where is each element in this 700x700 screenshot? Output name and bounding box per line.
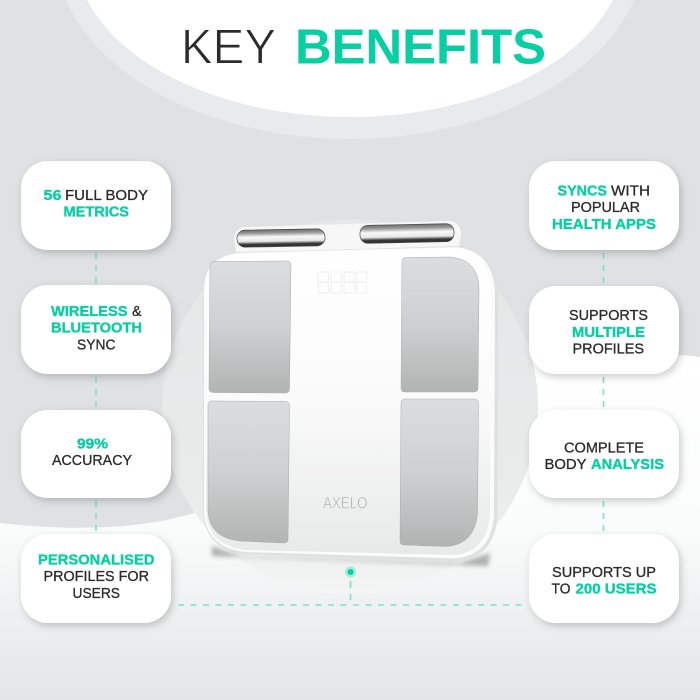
electrode pad: bottom left bbox=[208, 401, 290, 543]
connector: left column bbox=[95, 253, 97, 534]
card: supports up to 200 users: 200 USERS bbox=[576, 582, 657, 598]
scale body edge bbox=[203, 246, 498, 562]
marker dot bbox=[345, 566, 356, 578]
brand logo: AXELO bbox=[323, 494, 368, 512]
card: wireless and bluetooth sync: BLUETOOTH bbox=[51, 320, 142, 336]
electrode pad: top left bbox=[209, 261, 291, 393]
title bbox=[181, 20, 546, 74]
electrode pad: bottom right bbox=[400, 399, 478, 546]
card: 56 full body metrics bbox=[21, 161, 171, 250]
card: supports multiple profiles: SUPPORTS bbox=[569, 308, 648, 324]
electrode pad: top right bbox=[401, 257, 479, 392]
handle base bbox=[234, 221, 461, 252]
card: wireless and bluetooth sync: WIRELESS bbox=[51, 304, 128, 320]
background hill bbox=[0, 353, 700, 700]
digital display bbox=[318, 272, 366, 293]
card: personalised profiles: PROFILES FOR bbox=[44, 569, 149, 585]
card: 56 full body metrics: METRICS bbox=[64, 204, 129, 220]
card: syncs with popular health apps: SYNCS bbox=[558, 184, 607, 200]
card: supports up to 200 users: SUPPORTS UP bbox=[552, 565, 656, 581]
card: supports multiple profiles: PROFILES bbox=[572, 342, 644, 358]
scale shadow bbox=[212, 546, 490, 566]
card: personalised profiles: PERSONALISED bbox=[38, 552, 154, 568]
card: syncs with popular health apps: HEALTH APPS bbox=[552, 217, 656, 233]
right chrome handle bbox=[360, 224, 454, 243]
card: wireless and bluetooth sync: & bbox=[132, 304, 142, 320]
connector: vertical line from dot bbox=[350, 581, 352, 600]
title: KEY bbox=[181, 20, 276, 74]
card: 99% accuracy bbox=[21, 410, 171, 498]
card: syncs with popular health apps: POPULAR bbox=[571, 200, 640, 216]
card: syncs with popular health apps: WITH bbox=[611, 184, 650, 200]
title: BENEFITS bbox=[295, 20, 546, 74]
card: supports up to 200 users: TO bbox=[552, 582, 570, 598]
left chrome handle bbox=[237, 229, 325, 247]
card: supports multiple profiles bbox=[529, 286, 679, 374]
background circle behind scale bbox=[162, 219, 538, 595]
card: supports multiple profiles: MULTIPLE bbox=[572, 325, 645, 341]
card: syncs with popular health apps bbox=[529, 161, 679, 250]
card: complete body analysis bbox=[529, 410, 679, 498]
card: personalised profiles bbox=[21, 534, 171, 623]
card: complete body analysis: ANALYSIS bbox=[591, 457, 664, 473]
card: wireless and bluetooth sync: SYNC bbox=[77, 338, 116, 354]
card: wireless and bluetooth sync bbox=[21, 285, 171, 374]
card: supports up to 200 users bbox=[529, 534, 679, 623]
header inner ellipse bbox=[74, 0, 626, 117]
card: 56 full body metrics: 56 bbox=[44, 188, 62, 204]
card: personalised profiles: USERS bbox=[72, 586, 120, 602]
card: 99% accuracy: ACCURACY bbox=[52, 453, 132, 469]
scale body top bbox=[206, 248, 491, 555]
card: complete body analysis: COMPLETE bbox=[564, 440, 644, 456]
product: smart scale bbox=[203, 221, 498, 566]
connector: right column bbox=[602, 253, 604, 534]
header outer ellipse bbox=[56, 0, 644, 139]
connector: horizontal line under scale bbox=[178, 604, 525, 606]
card: complete body analysis: BODY bbox=[544, 457, 587, 473]
card: 99% accuracy: 99% bbox=[77, 436, 108, 452]
scale body rim bbox=[204, 247, 495, 558]
card: 56 full body metrics: FULL BODY bbox=[65, 188, 148, 204]
